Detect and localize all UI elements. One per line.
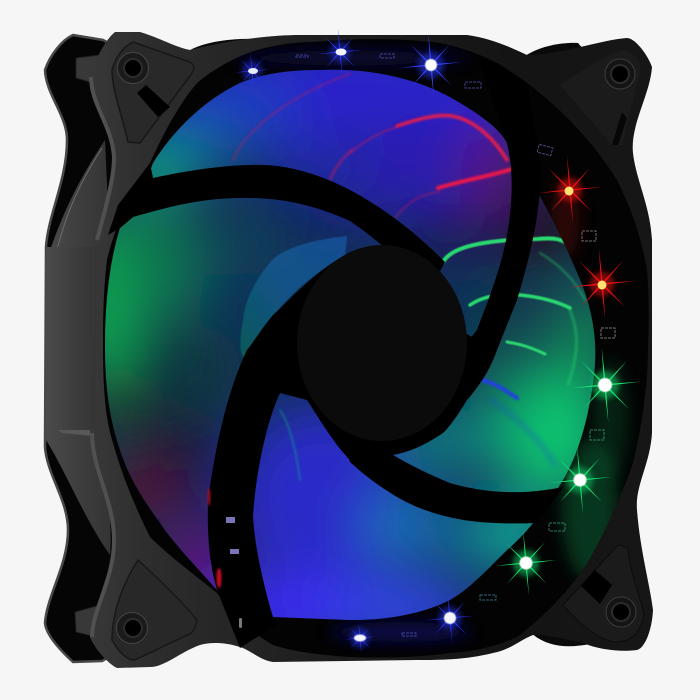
- LED chips unlit: [296, 54, 615, 636]
- rear frame: left side: [45, 35, 140, 662]
- illustration: RGB LED case fan: [44, 28, 653, 668]
- front frame: [47, 32, 653, 668]
- colour wash: [105, 70, 596, 620]
- screw top-left: [118, 52, 148, 84]
- green light reflections: [443, 238, 585, 385]
- corner recess bottom-right: [563, 545, 644, 642]
- frame left lip highlight: [91, 77, 114, 637]
- red light reflections: [233, 74, 512, 218]
- LED: green white: [496, 531, 556, 595]
- LED: green white: [570, 348, 640, 422]
- coloured glow on right of ring: [230, 50, 628, 642]
- slot top-right: [612, 112, 627, 145]
- screw bottom-right: [606, 597, 636, 627]
- blue light reflections: [280, 380, 555, 480]
- LED: blue white: [426, 592, 474, 644]
- hub: [297, 245, 467, 441]
- slot bottom-right: [581, 570, 612, 604]
- fan arms: [108, 58, 563, 648]
- LED: blue: [318, 28, 362, 76]
- arm: upper left: [108, 163, 445, 290]
- LED: red: [538, 156, 602, 224]
- arm 4 detail: LED strip chips: [208, 488, 242, 628]
- slot top-left: [137, 85, 170, 117]
- screw bottom-left: [116, 612, 148, 644]
- corner recess top-left: [112, 42, 194, 143]
- arm: lower left: [208, 255, 370, 648]
- corner recess bottom-left: [112, 560, 197, 660]
- side wall of frame: [47, 247, 97, 430]
- LED: green white: [548, 446, 612, 514]
- fan blades with RGB light: [105, 70, 596, 620]
- arm: lower right: [340, 320, 563, 523]
- corner recess top-right: [560, 50, 640, 145]
- inner crescent of left blade: [240, 236, 347, 360]
- LED: red: [568, 248, 636, 320]
- rear frame tabs: [190, 39, 590, 646]
- LED ring opening: [95, 30, 655, 665]
- LED: blue: [234, 52, 270, 90]
- screw top-right: [605, 59, 635, 89]
- LED: blue white: [401, 33, 461, 97]
- arm: upper right: [465, 58, 540, 350]
- LED: blue white: [344, 621, 376, 655]
